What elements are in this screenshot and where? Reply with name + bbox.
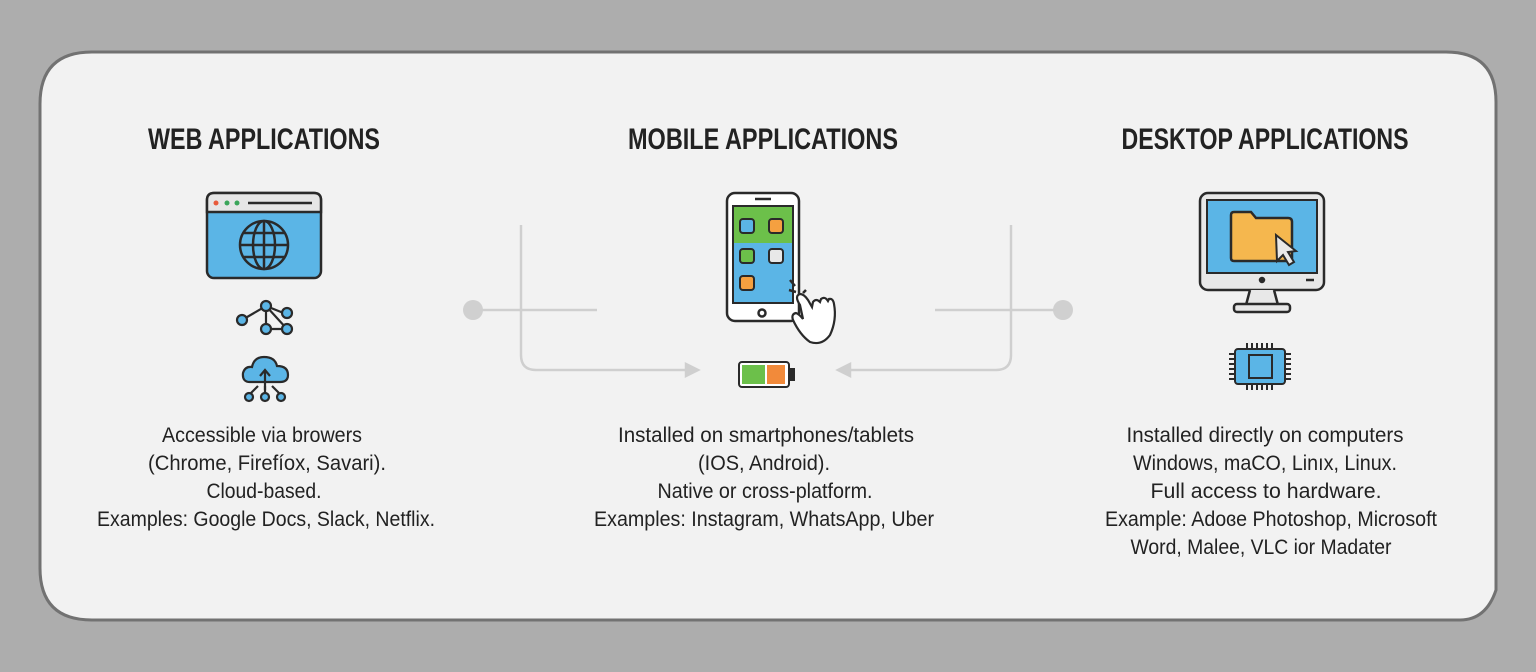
text block: mobile applications: Examples: Instagram, WhatsApp, Uber	[594, 508, 934, 531]
text block: mobile applications	[594, 424, 934, 531]
text block: desktop applications	[1105, 424, 1437, 559]
icon: browser window with globe	[207, 193, 321, 278]
text block: mobile applications: (IOS, Android).	[698, 452, 830, 475]
text block: desktop applications: Example: Adoɞe Photoshop, Microsoft	[1105, 508, 1437, 531]
text block: mobile applications: Native or cross-platform.	[658, 480, 872, 503]
arrow: left connector	[463, 225, 698, 376]
text block: desktop applications: Word, Malee, VLC ior Madater	[1130, 536, 1392, 559]
icon: cloud upload	[243, 357, 288, 401]
text block: web applications: Examples: Google Docs, Slack, Netflix.	[97, 508, 435, 531]
text block: web applications: Cloud-based.	[206, 480, 322, 503]
arrow: right connector	[838, 225, 1073, 376]
icon: desktop monitor with folder	[1200, 193, 1324, 312]
text block: web applications: (Chrome, Firefíox, Savari).	[148, 452, 386, 475]
heading: mobile applications: MOBILE APPLICATIONS	[628, 123, 898, 156]
icon: battery	[739, 362, 794, 387]
text block: mobile applications: Installed on smartphones/tablets	[618, 424, 914, 447]
heading: desktop applications: DESKTOP APPLICATIONS	[1122, 123, 1408, 156]
text block: desktop applications: Installed directly on computers	[1126, 424, 1404, 447]
icon: smartphone with touch	[727, 193, 835, 343]
icon: network nodes	[237, 301, 292, 334]
text block: desktop applications: Windows, maCO, Linıx, Linux.	[1133, 452, 1397, 475]
text block: web applications: Accessible via browers	[162, 424, 362, 447]
heading: web applications: WEB APPLICATIONS	[148, 123, 380, 156]
text block: web applications	[97, 424, 435, 531]
text block: desktop applications: Full access to hardware.	[1150, 480, 1382, 503]
icon: cpu chip	[1229, 343, 1291, 390]
